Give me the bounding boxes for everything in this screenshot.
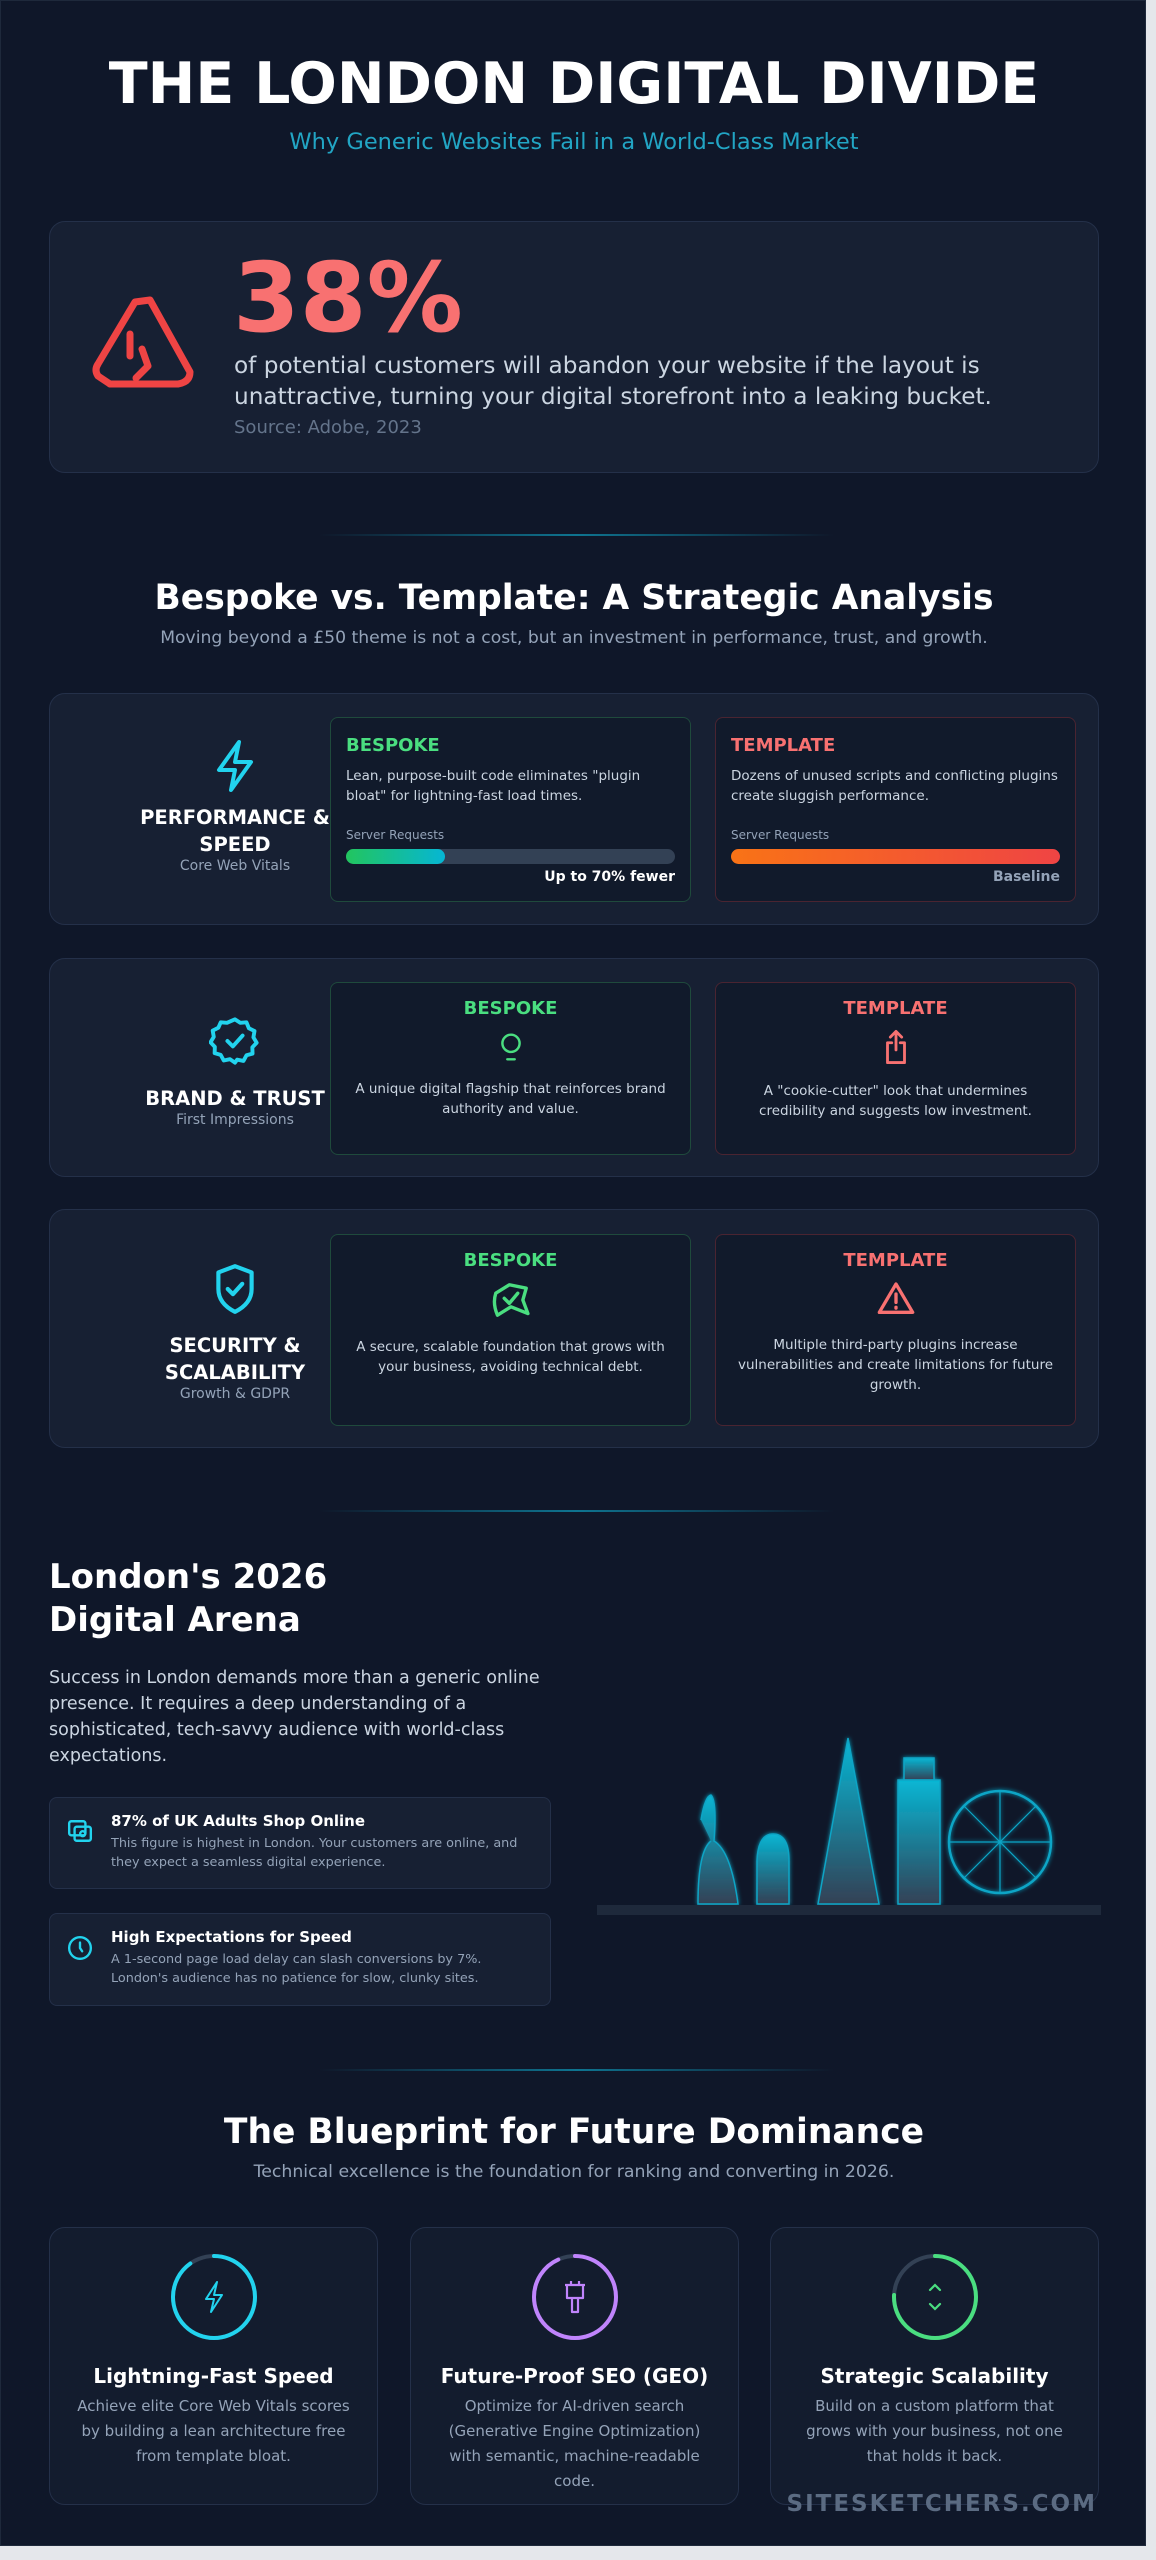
card: future-proof seo	[410, 2227, 739, 2505]
row label: performance: Core Web Vitals	[180, 858, 290, 874]
heading: london arena: London's 2026	[49, 1557, 327, 1597]
row label: security: SCALABILITY	[165, 1361, 305, 1384]
template box security: TEMPLATE	[843, 1250, 948, 1271]
bespoke box security: BESPOKE	[464, 1250, 557, 1271]
panel: brand & trust	[49, 958, 1099, 1177]
panel: security & scalability	[49, 1209, 1099, 1448]
subtitle: Why Generic Websites Fail in a World-Class Market	[289, 129, 859, 155]
card: speed expectations	[49, 1913, 551, 2006]
panel: stat card	[49, 221, 1099, 473]
heading: london arena	[49, 1557, 327, 1640]
icon: broken bell alert	[92, 296, 194, 388]
heading: london arena: Digital Arena	[49, 1600, 301, 1640]
template box brand: TEMPLATE	[843, 998, 948, 1019]
heading: bespoke vs template: Bespoke vs. Template: A Strategic Analysis	[155, 578, 993, 618]
row label: security: Growth & GDPR	[180, 1386, 290, 1402]
card: 87% shop online: 87% of UK Adults Shop Online	[111, 1812, 365, 1830]
row label: performance: PERFORMANCE &	[140, 806, 330, 829]
icon: ring plug	[532, 2254, 618, 2340]
card: future-proof seo: Future-Proof SEO (GEO)	[441, 2364, 708, 2388]
card: future-proof seo: Optimize for AI-driven search (Generative Engine Optimization) with semantic, machine-readable code.	[449, 2397, 700, 2490]
source: Source: Adobe, 2023	[234, 417, 422, 438]
row label: brand	[145, 1017, 325, 1128]
icon: clock	[68, 1936, 92, 1960]
heading: blueprint: The Blueprint for Future Dominance	[224, 2112, 924, 2152]
illustration: london skyline	[597, 1736, 1101, 1915]
template box performance: TEMPLATE	[731, 735, 835, 756]
bespoke box brand: BESPOKE	[464, 998, 557, 1019]
bespoke box performance: BESPOKE	[346, 735, 440, 756]
subheading: Moving beyond a £50 theme is not a cost, but an investment in performance, trust, and growth.	[160, 628, 988, 648]
row label: security	[165, 1264, 306, 1402]
template box brand	[715, 982, 1076, 1155]
panel: performance & speed	[49, 693, 1099, 925]
card: lightning-fast speed: Achieve elite Core Web Vitals scores by building a lean architecture free from template bloat.	[77, 2397, 350, 2465]
bespoke box brand	[330, 982, 691, 1155]
bar: bespoke	[346, 849, 675, 864]
bar: template	[731, 849, 1060, 864]
bespoke box brand: A unique digital flagship that reinforces brand authority and value.	[355, 1081, 666, 1117]
template box security	[715, 1234, 1076, 1426]
bespoke box performance: Up to 70% fewer	[544, 869, 675, 885]
template box performance	[715, 717, 1076, 902]
card: strategic scalability	[770, 2227, 1099, 2505]
template box performance: Dozens of unused scripts and conflicting plugins create sluggish performance.	[731, 768, 1058, 804]
row label: security: SECURITY &	[170, 1334, 300, 1357]
template box brand: A "cookie-cutter" look that undermines credibility and suggests low investment.	[759, 1083, 1032, 1119]
icon: money	[68, 1820, 92, 1842]
card: speed expectations: A 1-second page load delay can slash conversions by 7%. London's audience has no patience for slow, clunky sites.	[111, 1952, 481, 1986]
card: lightning-fast speed	[49, 2227, 378, 2505]
paragraph: london: Success in London demands more than a generic online presence. It requires a deep understanding of a sophisticated, tech-savvy audience with world-class expectations.	[49, 1668, 540, 1766]
bespoke box performance: Server Requests	[346, 828, 444, 842]
row label: performance	[140, 740, 330, 874]
bespoke box performance	[330, 717, 691, 902]
big stat 38%: 38%	[233, 242, 463, 354]
row label: brand: First Impressions	[176, 1112, 294, 1128]
card: 87% shop online: This figure is highest in London. Your customers are online, and they expect a seamless digital experience.	[111, 1836, 517, 1870]
card: lightning-fast speed: Lightning-Fast Speed	[93, 2364, 334, 2388]
card: speed expectations: High Expectations for Speed	[111, 1928, 352, 1946]
icon: ring arrows	[892, 2254, 978, 2340]
stat description: of potential customers will abandon your website if the layout is unattractive, turning your digital storefront into a leaking bucket.	[234, 352, 992, 410]
bespoke box performance: Lean, purpose-built code eliminates "plugin bloat" for lightning-fast load times.	[346, 768, 640, 804]
icon: ring bolt	[171, 2254, 257, 2340]
watermark: SITESKETCHERS.COM	[787, 2491, 1097, 2517]
template box security: Multiple third-party plugins increase vulnerabilities and create limitations for future growth.	[738, 1337, 1053, 1393]
card: strategic scalability: Strategic Scalability	[820, 2364, 1049, 2388]
row label: performance: SPEED	[199, 833, 271, 856]
row label: brand: BRAND & TRUST	[145, 1087, 325, 1110]
bespoke box security	[330, 1234, 691, 1426]
bespoke box security: A secure, scalable foundation that grows with your business, avoiding technical debt.	[356, 1339, 665, 1375]
template box performance: Server Requests	[731, 828, 829, 842]
title: THE LONDON DIGITAL DIVIDE	[109, 51, 1039, 117]
card: strategic scalability: Build on a custom platform that grows with your business, not one that holds it back.	[806, 2397, 1063, 2465]
template box performance: Baseline	[993, 869, 1060, 885]
card: 87% shop online	[49, 1797, 551, 1889]
subheading: blueprint: Technical excellence is the foundation for ranking and converting in 2026.	[254, 2162, 894, 2182]
